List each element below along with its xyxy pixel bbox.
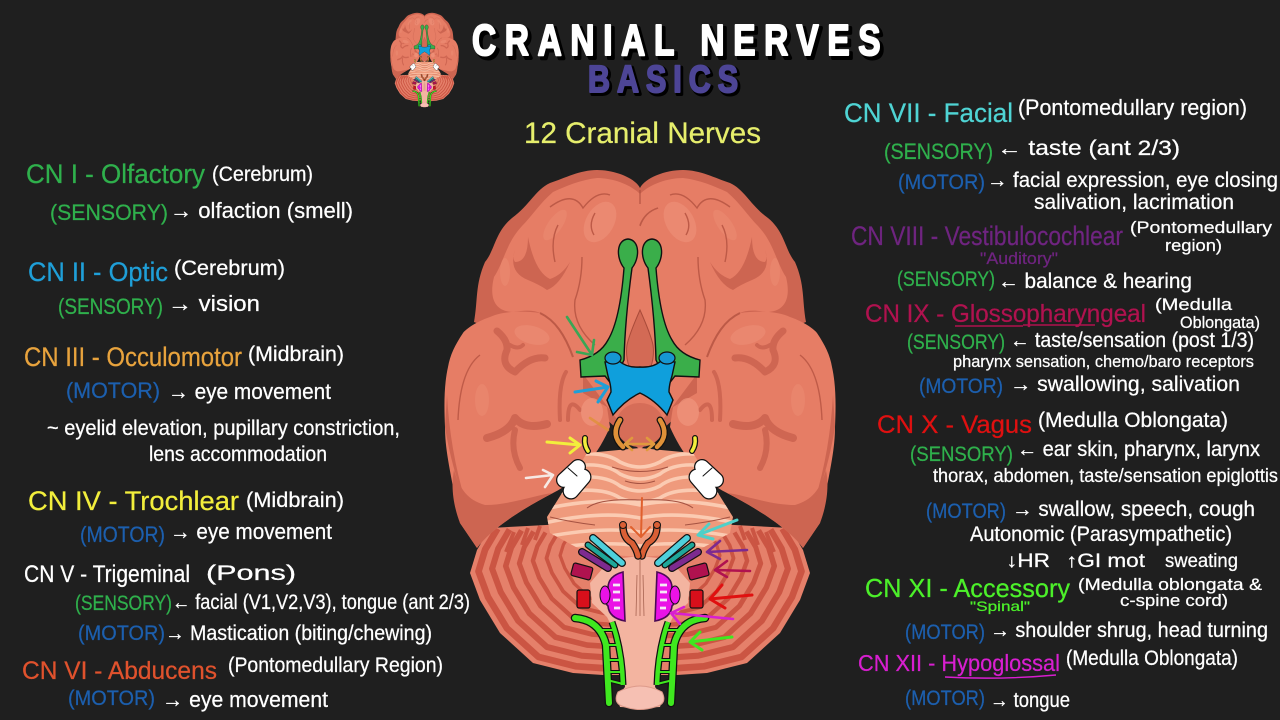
hypoglossal nerves <box>575 618 705 703</box>
CN VI text <box>22 654 443 712</box>
CN IX text: Oblongata) <box>1180 313 1260 332</box>
icon: small brain thumbnail <box>390 13 459 107</box>
CN XII text: CN XII - Hypoglossal <box>858 650 1060 676</box>
oculomotor and trochlear nerves <box>585 420 695 451</box>
CN IV text: → eye movement <box>170 519 332 544</box>
CN XII text: (Medulla Oblongata) <box>1066 647 1238 670</box>
CN VIII text: CN VIII - Vestibulocochlear <box>851 221 1123 251</box>
CN IX text: pharynx sensation, chemo/baro receptors <box>953 352 1254 371</box>
CN III text: CN III - Occulomotor <box>24 342 242 372</box>
vagus and accessory roots <box>571 563 709 608</box>
trigeminal nerves <box>564 467 716 491</box>
CN III text: ~ eyelid elevation, pupillary constriction, <box>47 417 400 440</box>
title: CRANIAL NERVES <box>472 17 889 65</box>
CN VI text: (Pontomedullary Region) <box>228 654 443 677</box>
pons <box>540 448 740 557</box>
CN III text: → eye movement <box>168 379 331 404</box>
CN I text: CN I - Olfactory <box>26 159 205 189</box>
CN V text: → Mastication (biting/chewing) <box>165 622 432 645</box>
CN I text: (Cerebrum) <box>212 163 313 186</box>
CN VII text: CN VII - Facial <box>844 98 1013 128</box>
CN VII text: → facial expression, eye closing <box>987 169 1278 192</box>
CN V text: (SENSORY) <box>75 592 172 615</box>
CN III text: (Midbrain) <box>248 343 344 366</box>
CN X text: (SENSORY) <box>910 443 1013 466</box>
CN XI text <box>865 573 1268 644</box>
CN IV text: CN IV - Trochlear <box>28 486 239 516</box>
cerebrum: frontal and temporal lobes <box>444 170 836 548</box>
CN I text: → olfaction (smell) <box>170 198 353 223</box>
CN II text <box>28 257 285 319</box>
CN II text: CN II - Optic <box>28 257 168 287</box>
CN X text: ↓HR <box>1006 551 1050 572</box>
CN VI text: (MOTOR) <box>68 687 155 710</box>
CN VII text: (MOTOR) <box>898 171 985 194</box>
CN X text: ↑GI mot <box>1066 551 1146 572</box>
CN VIII text: (SENSORY) <box>897 268 995 291</box>
CN VI text: CN VI - Abducens <box>22 657 217 685</box>
CN IV text <box>28 486 344 547</box>
CN V text <box>24 561 470 645</box>
CN V text: ← facial (V1,V2,V3), tongue (ant 2/3) <box>172 591 470 614</box>
annotation arrows on the brain <box>526 317 752 650</box>
CN VIII text: (Pontomedullary <box>1130 218 1273 237</box>
CN XI text: c-spine cord) <box>1120 591 1228 610</box>
CN VI text: → eye movement <box>162 687 328 712</box>
CN X text: → swallow, speech, cough <box>1012 498 1255 521</box>
CN IX text: (SENSORY) <box>907 331 1005 354</box>
CN IV text: (Midbrain) <box>246 489 344 512</box>
abducens nerves <box>620 522 660 556</box>
CN IV text: (MOTOR) <box>80 522 165 547</box>
CN VII text: salivation, lacrimation <box>1034 191 1234 214</box>
CN XI text: "Spinal" <box>970 598 1030 614</box>
CN II text: (SENSORY) <box>58 294 163 319</box>
CN IX text: (MOTOR) <box>919 375 1003 398</box>
central brain illustration <box>444 170 836 710</box>
CN IX text: → swallowing, salivation <box>1010 373 1240 396</box>
CN III text <box>24 342 400 466</box>
CN X text: Autonomic (Parasympathetic) <box>970 523 1232 546</box>
CN X text <box>877 409 1278 572</box>
title: CRANIAL NERVES <box>475 20 892 68</box>
CN VII text: (Pontomedullary region) <box>1018 95 1247 120</box>
CN III text: lens accommodation <box>149 443 327 466</box>
CN IX text: ← taste/sensation (post 1/3) <box>1010 329 1254 352</box>
CN XI text: → shoulder shrug, head turning <box>990 619 1268 642</box>
CN VII text: (SENSORY) <box>884 139 993 164</box>
heading: 12 Cranial Nerves: 12 Cranial Nerves <box>524 117 761 150</box>
CN X text: (Medulla Oblongata) <box>1038 409 1228 432</box>
CN X text: (MOTOR) <box>926 500 1006 523</box>
CN VIII text <box>851 218 1273 293</box>
CN I text <box>26 159 353 225</box>
cerebellum <box>470 520 810 675</box>
CN XII text: (MOTOR) <box>905 687 985 710</box>
CN XI text: (Medulla oblongata & <box>1078 575 1263 594</box>
CN III text: (MOTOR) <box>66 378 160 403</box>
CN VIII text: region) <box>1165 236 1222 255</box>
CN V text: CN V - Trigeminal <box>24 561 190 588</box>
CN XII text <box>858 647 1238 712</box>
medulla <box>590 556 690 710</box>
facial, vestibulocochlear and glossopharyngeal nerves <box>582 538 698 568</box>
CN X text: sweating <box>1165 551 1238 572</box>
CN V text: (MOTOR) <box>78 622 165 645</box>
CN VII text: ← taste (ant 2/3) <box>997 137 1180 160</box>
CN I text: (SENSORY) <box>50 200 168 225</box>
CN II text: (Cerebrum) <box>174 257 285 280</box>
CN X text: CN X - Vagus <box>877 411 1032 439</box>
optic nerves and chiasm <box>605 352 675 415</box>
CN IX text: (Medulla <box>1155 295 1233 314</box>
cochlear magenta structure <box>600 572 680 621</box>
CN II text: → vision <box>168 291 260 316</box>
CN X text: ← ear skin, pharynx, larynx <box>1017 438 1260 461</box>
CN VIII text: "Auditory" <box>980 249 1058 268</box>
olfactory nerves <box>580 239 700 385</box>
CN V text: (Pons) <box>206 562 296 585</box>
CN XI text: (MOTOR) <box>905 621 985 644</box>
CN IX text <box>865 295 1260 398</box>
CN VIII text: ← balance & hearing <box>998 270 1192 293</box>
CN IX text: CN IX - Glossopharyngeal <box>865 300 1146 328</box>
CN XII text: → tongue <box>990 689 1070 712</box>
CN VII text <box>844 95 1278 214</box>
subtitle: BASICS <box>588 59 745 101</box>
subtitle: BASICS <box>590 61 747 103</box>
CN XI text: CN XI - Accessory <box>865 573 1070 603</box>
